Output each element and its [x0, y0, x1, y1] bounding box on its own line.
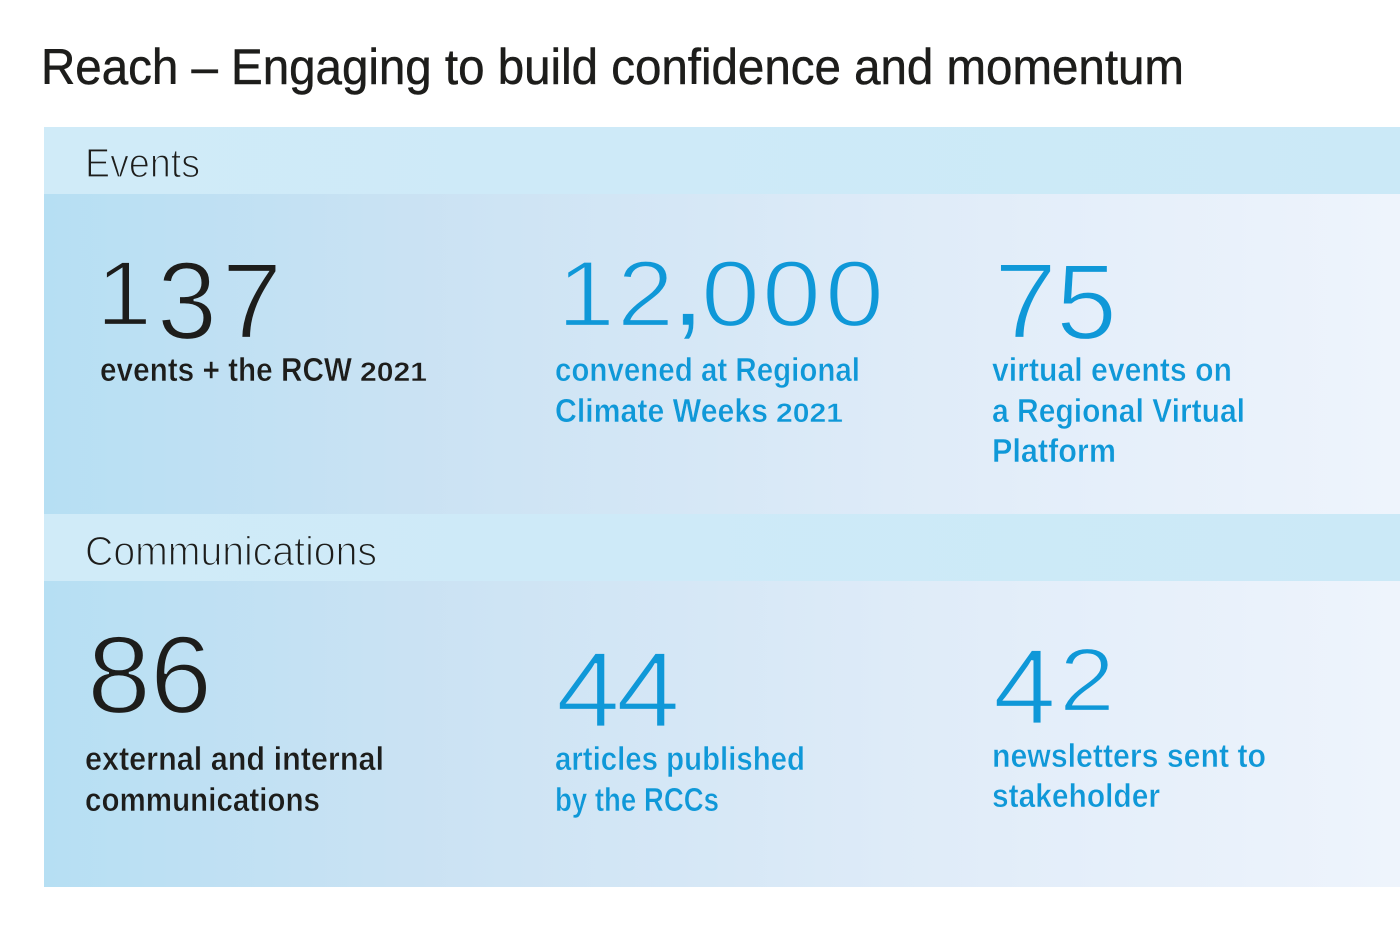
number: 75: [994, 240, 1117, 362]
label: virtual events on a Regional Virtual Platform: a Regional Virtual: [992, 392, 1245, 429]
number: 44: 4: [556, 629, 620, 750]
heading band: communications: [44, 514, 1400, 581]
number: 12,000: 0: [701, 241, 760, 346]
number: 75: 7: [994, 240, 1057, 361]
number: 42: 4: [993, 626, 1056, 747]
label: events + the RCW 2021: 2021: [360, 357, 427, 387]
label: convened at Regional Climate Weeks 2021: Climate Weeks: [555, 392, 768, 429]
label: external and internal communications: external and internal: [85, 740, 384, 777]
panel: events: [44, 127, 1400, 514]
number: 86: 6: [150, 614, 212, 737]
stat: 86 communications: [85, 614, 384, 818]
number: 137: 7: [222, 240, 282, 361]
number: 86: 8: [87, 614, 151, 737]
number: 42: 2: [1059, 631, 1115, 731]
heading band: events: Events: [85, 140, 200, 186]
stat: 137 events: [96, 240, 427, 388]
label: newsletters sent to stakeholder: newsletters sent to: [992, 737, 1266, 774]
number: 12,000: [557, 241, 884, 346]
label: articles published by the RCCs: [555, 740, 805, 818]
number: 44: [556, 629, 680, 750]
stat: 44 articles: [555, 629, 805, 818]
number: 137: [96, 240, 282, 363]
heading band: events: [44, 127, 1400, 194]
label: virtual events on a Regional Virtual Platform: Platform: [992, 432, 1116, 469]
number: 12,000: 0: [825, 241, 884, 346]
label: convened at Regional Climate Weeks 2021: convened at Regional: [555, 351, 860, 388]
number: 12,000: 1: [557, 241, 615, 346]
number: 137: 3: [157, 240, 217, 363]
heading band: communications: Communications: [85, 528, 377, 574]
label: newsletters sent to stakeholder: [992, 737, 1266, 814]
stat: 75 virtual events: [992, 240, 1245, 469]
stat: 42 newsletters: [992, 626, 1266, 814]
label: external and internal communications: communications: [85, 781, 320, 818]
number: 86: [87, 614, 212, 737]
number: 137: 1: [96, 243, 152, 345]
number: 42: [993, 626, 1115, 747]
label: virtual events on a Regional Virtual Platform: [992, 351, 1245, 469]
label: convened at Regional Climate Weeks 2021: 2021: [776, 398, 843, 428]
label: articles published by the RCCs: by the RCCs: [555, 781, 719, 818]
number: 12,000: 2: [617, 241, 674, 346]
title: Reach – Engaging to build confidence and momentum: [41, 39, 1184, 95]
number: 44: 4: [616, 629, 680, 750]
label: virtual events on a Regional Virtual Platform: virtual events on: [992, 351, 1232, 388]
number: 75: 5: [1056, 241, 1117, 362]
label: newsletters sent to stakeholder: stakeholder: [992, 777, 1160, 814]
label: convened at Regional Climate Weeks 2021: [555, 351, 860, 429]
stat: 12,000 convened: [555, 241, 884, 429]
label: external and internal communications: [85, 740, 384, 818]
label: articles published by the RCCs: articles published: [555, 740, 805, 777]
panel: communications: [44, 514, 1400, 887]
number: 12,000: 0: [762, 241, 821, 346]
number: 12,000: ,: [675, 246, 701, 346]
label: events + the RCW 2021: events + the RCW: [100, 351, 353, 388]
